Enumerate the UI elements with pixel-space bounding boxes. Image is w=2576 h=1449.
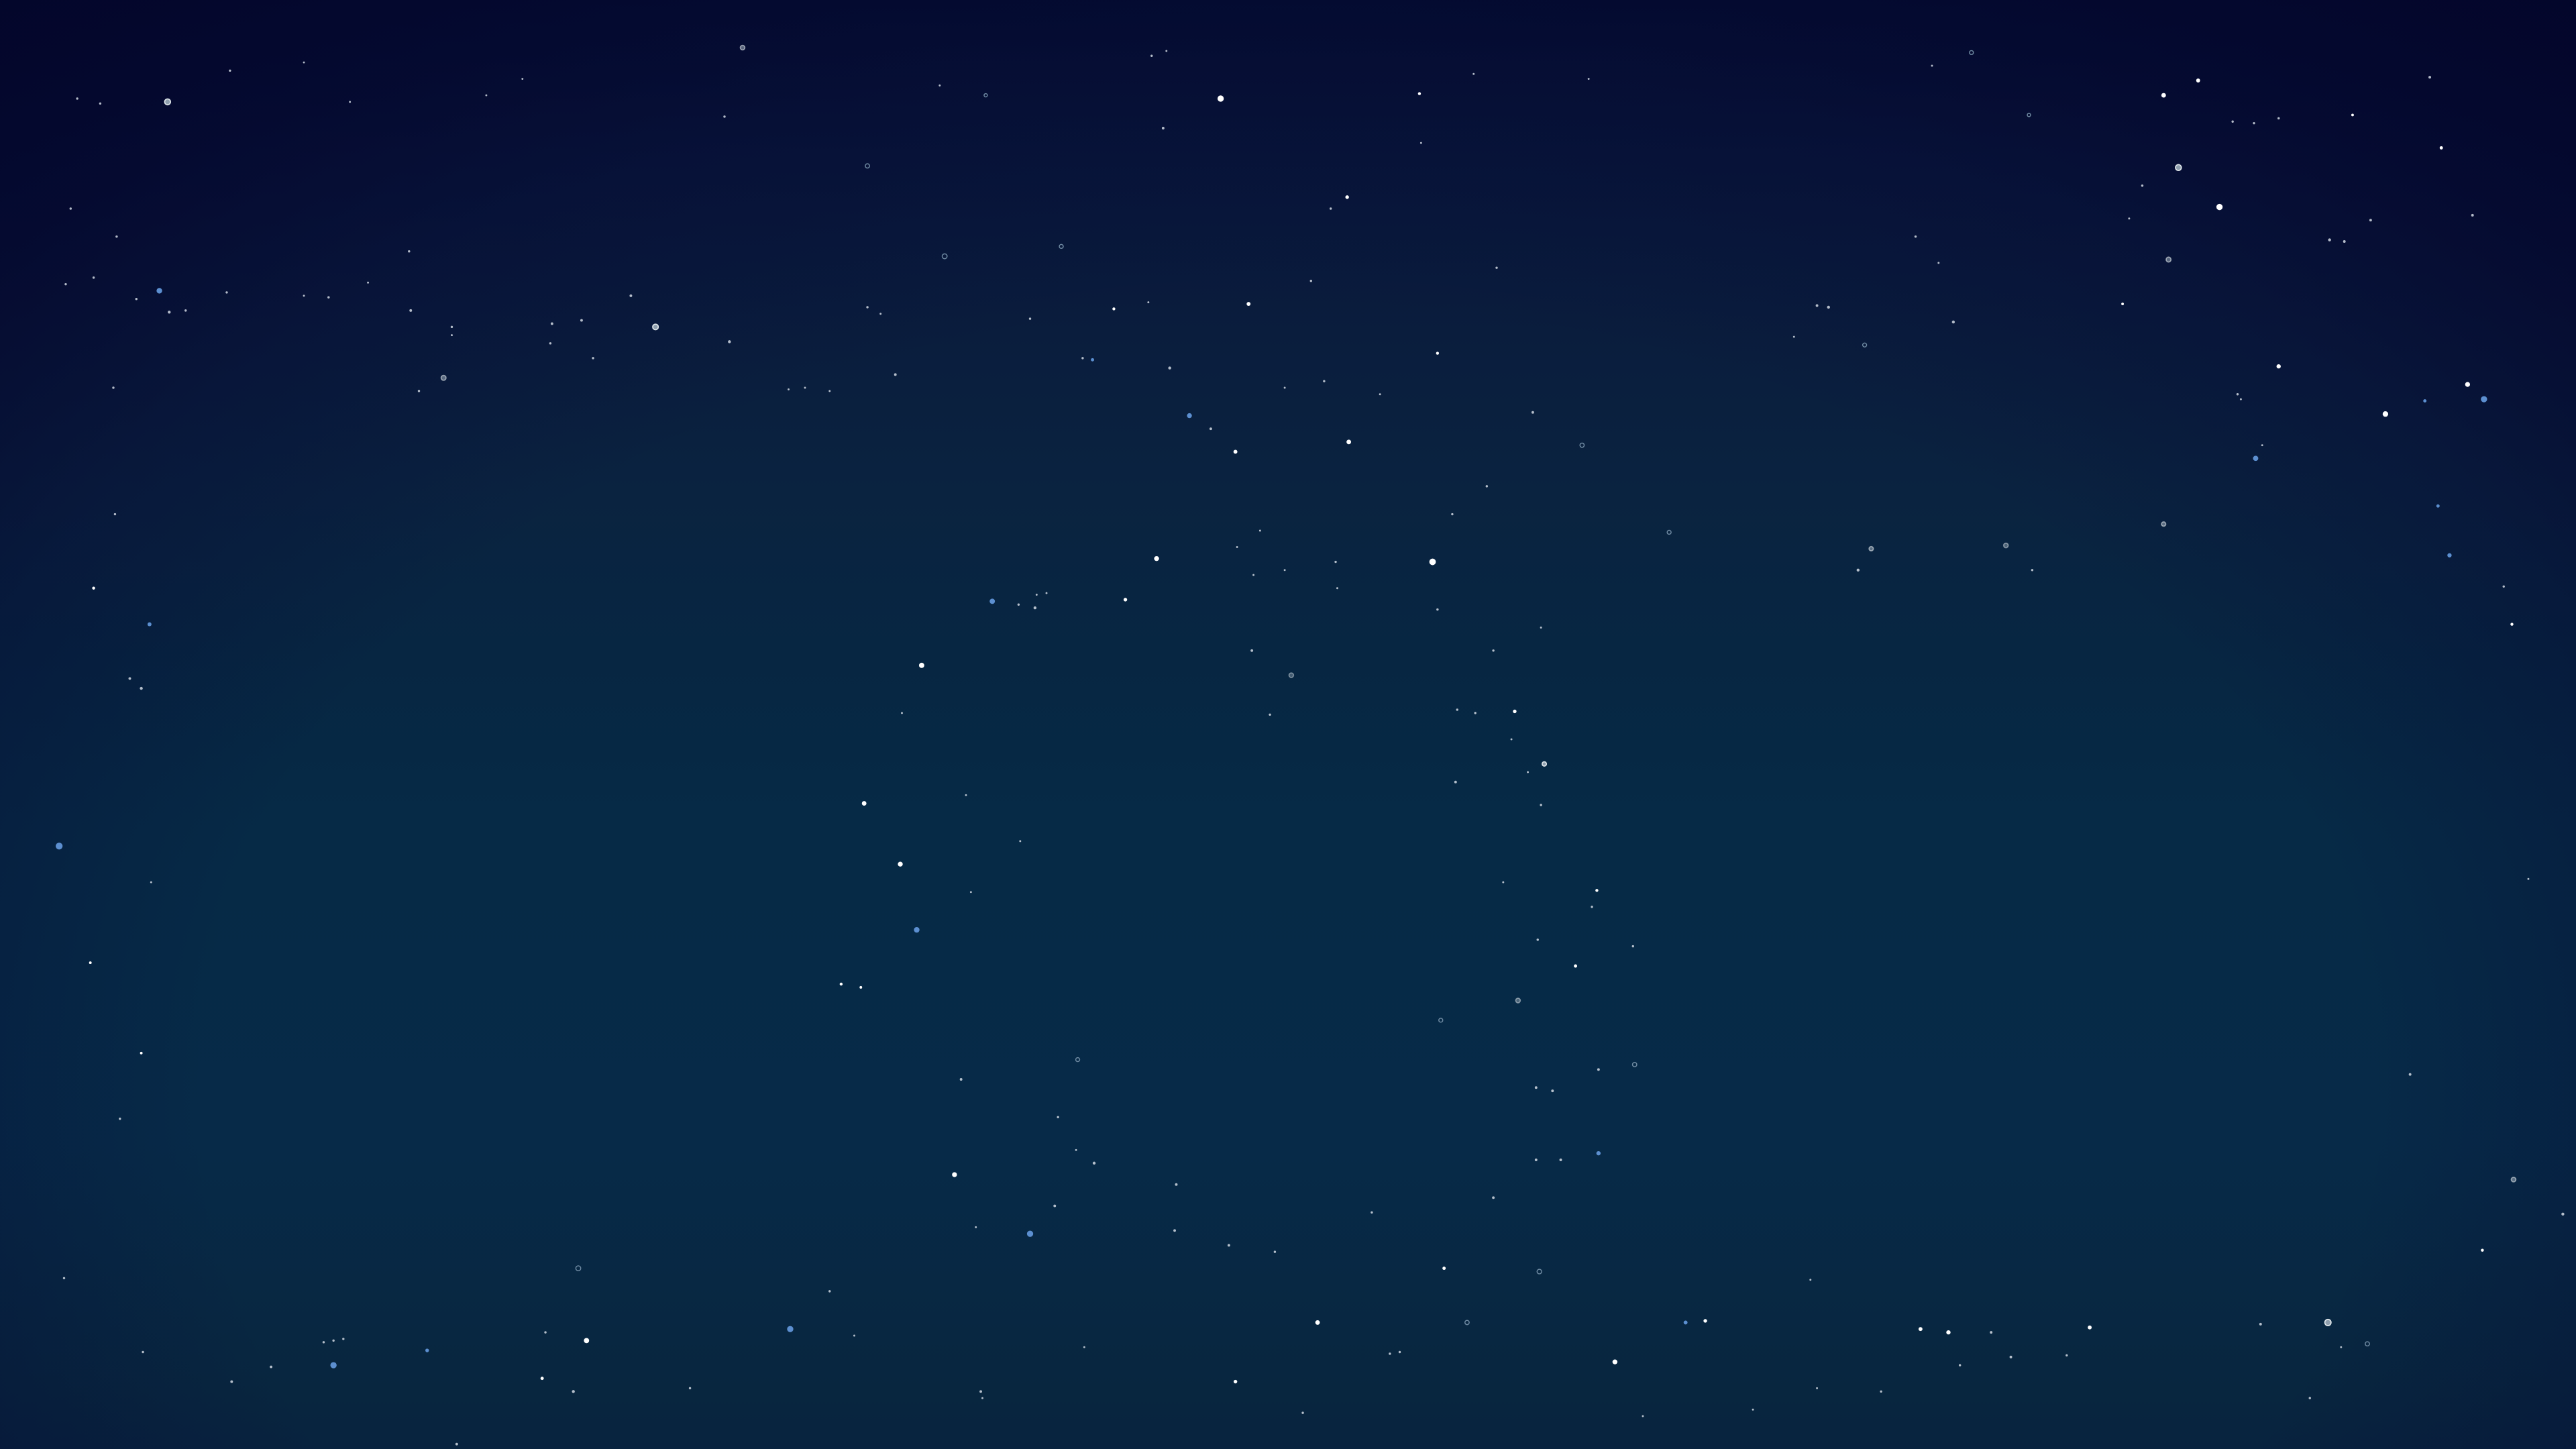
dim rings (576, 50, 2369, 1346)
blue stars (56, 288, 2487, 1368)
